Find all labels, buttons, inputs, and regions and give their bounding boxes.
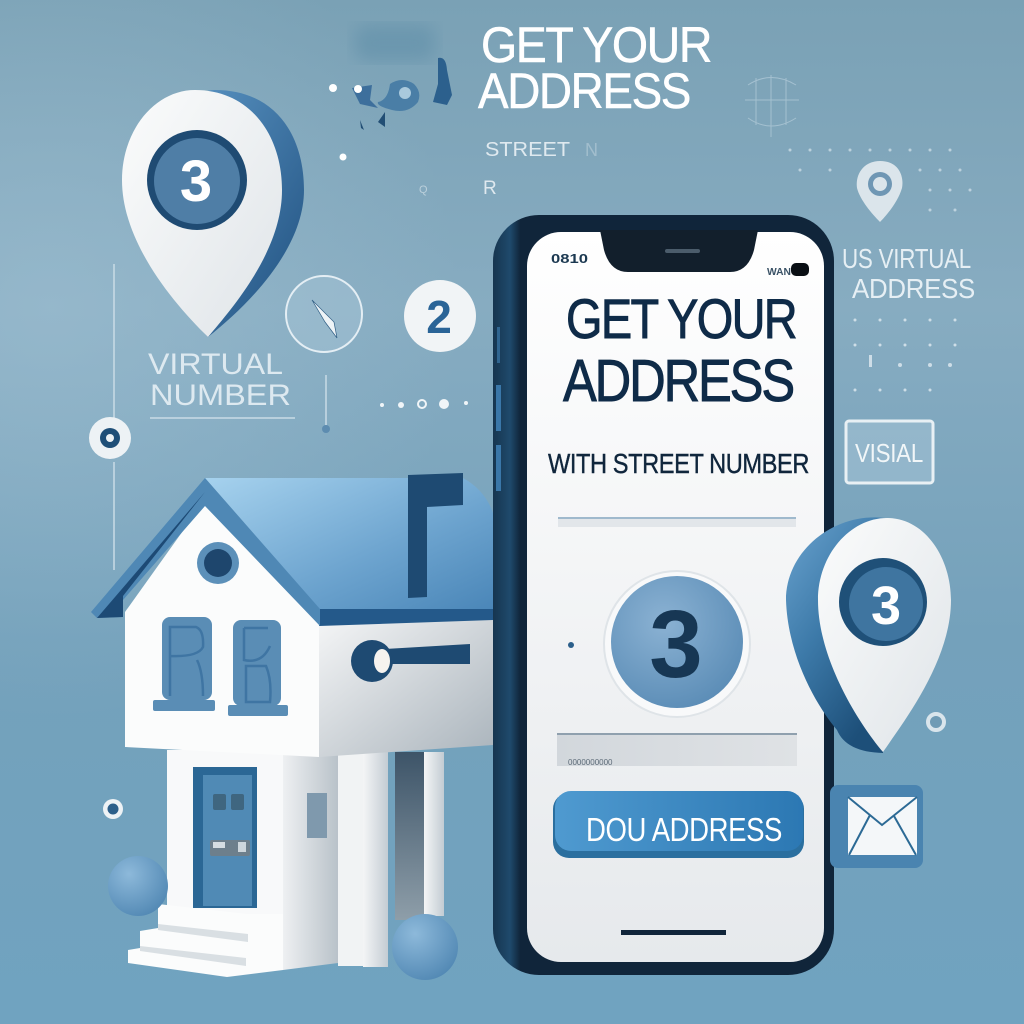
mailbox flag <box>408 473 463 598</box>
icon: large location pin with 3: 3 <box>180 149 212 214</box>
phone: heading: GET YOUR <box>566 287 796 350</box>
label: us virtual address <box>842 243 975 304</box>
house illustration <box>91 473 493 980</box>
small ring left bottom <box>103 799 123 819</box>
phone: side buttons <box>496 327 501 491</box>
subtitle: street: N <box>585 140 598 160</box>
house: wall vent <box>307 793 327 838</box>
house: roof gable shadow <box>97 492 205 618</box>
house: lower front wall <box>167 750 283 970</box>
phone: number disc: 3 <box>649 591 703 698</box>
house: door <box>193 767 257 908</box>
phone: button: DOU ADDRESS <box>586 811 782 848</box>
small ring right <box>928 714 944 730</box>
icon: badge 2: 2 <box>426 291 452 343</box>
icon: envelope <box>830 785 923 868</box>
phone: heading <box>563 287 796 414</box>
dotted pattern top right <box>788 148 972 212</box>
icon: large location pin with 3 <box>122 90 304 337</box>
smartphone <box>493 215 834 975</box>
smartphone: WAN <box>767 267 791 278</box>
progress dots <box>380 399 468 409</box>
phone: subheading: WITH STREET NUMBER <box>548 448 809 479</box>
phone: input field: 0000000000 <box>568 758 613 767</box>
phone: number disc <box>604 571 750 717</box>
label: virtual number: VIRTUAL <box>148 348 283 381</box>
label: virtual number <box>148 348 291 412</box>
title: top heading <box>478 17 711 119</box>
phone: body <box>493 215 834 975</box>
house: roof band <box>319 609 493 626</box>
label: visial card <box>846 421 933 483</box>
house: upper wall front <box>125 500 319 757</box>
icon: right location pin with 3 <box>786 517 951 753</box>
house: lower pillars <box>338 752 444 967</box>
label: visial card: VISIAL <box>855 438 923 468</box>
phone: status bar: 0810 <box>551 251 588 266</box>
icon: round window <box>197 542 239 584</box>
icon: compass circle <box>286 276 362 433</box>
house: steps <box>128 904 283 977</box>
window right <box>228 620 288 716</box>
subtitle: street: Q <box>419 184 428 196</box>
subtitle: street <box>419 139 598 199</box>
phone: home bar <box>621 930 726 935</box>
house: lower side wall <box>283 755 338 970</box>
icon: small pin top right <box>857 161 902 222</box>
dotted pattern right <box>854 318 956 392</box>
globe wireframe icon <box>745 75 799 137</box>
decorative scattered blue fragments near title <box>329 25 452 160</box>
house: roof plane <box>205 478 493 610</box>
icon: badge 2 <box>404 280 476 352</box>
window left <box>153 617 215 711</box>
phone: screen <box>527 232 824 962</box>
title: top heading: GET YOUR <box>481 17 711 73</box>
subtitle: street: R <box>483 178 497 199</box>
timeline lines left <box>114 264 326 570</box>
phone: notch <box>600 230 758 272</box>
phone: button <box>553 791 804 858</box>
phone: input field <box>557 733 797 767</box>
phone: heading: ADDRESS <box>563 348 793 414</box>
phone: divider <box>558 517 796 527</box>
label: virtual number: NUMBER <box>150 379 291 412</box>
subtitle: street: STREET <box>485 139 570 161</box>
balls <box>108 856 168 916</box>
title: top heading: ADDRESS <box>478 63 690 119</box>
icon: small ring node <box>89 417 131 459</box>
house: upper wall right <box>319 620 493 757</box>
mailbox handle <box>351 640 470 682</box>
label: us virtual address: ADDRESS <box>852 273 975 304</box>
house: roof gable edge <box>91 478 320 626</box>
icon: right location pin with 3: 3 <box>871 576 901 636</box>
label: us virtual address: US VIRTUAL <box>842 243 971 274</box>
